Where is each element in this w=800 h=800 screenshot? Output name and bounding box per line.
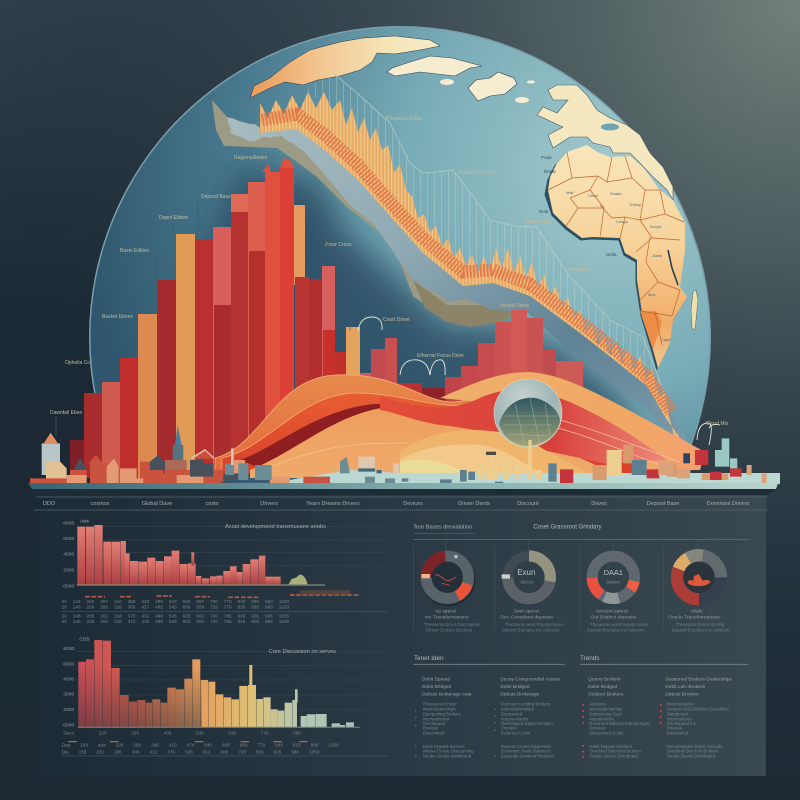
lower axis: 8000 [63, 646, 75, 652]
upper axis: 2000 [63, 568, 75, 574]
donut 3 text: Amount spend [596, 608, 628, 614]
text column 4: Overland Discount Brokers [667, 749, 718, 754]
text column 3 [588, 676, 650, 759]
wave: light hill [400, 445, 540, 478]
red bullet markers [582, 704, 662, 758]
text column 2: Dampened [501, 711, 523, 716]
labels on ocean: Praia [541, 155, 552, 160]
text column 1: Debit Deposit Brokers [423, 744, 465, 749]
green hump [289, 574, 308, 584]
platform strip [28, 483, 778, 495]
text column 2: Dormant Lending Brokers [501, 702, 550, 707]
country labels: Kenya [650, 224, 662, 229]
arch connectors [358, 317, 720, 445]
lower table: Dia 158 230 295 346 412 476 538 612 688 768 850 915 980 1050 [62, 749, 320, 754]
blue grey [402, 460, 647, 486]
donut 2 text: Deposit Energies Inc Advisors [502, 627, 559, 632]
text column 3: Overland Discount Brokers [589, 749, 641, 754]
labels on ocean: Dola [539, 209, 549, 214]
header row: costo [205, 501, 219, 507]
bar annotations: Eastern Transfer [459, 170, 496, 176]
text column 4: Dampened [667, 711, 688, 716]
text column 4: Discounted [667, 731, 689, 736]
lower axis: 3000 [63, 692, 75, 698]
country labels: Ethiop [630, 202, 642, 207]
wave guide line [270, 443, 410, 467]
bar annotations: Court Driver [383, 317, 410, 323]
upper axis: 0000 [63, 583, 75, 589]
text column 4: Debuts Brokers [665, 692, 699, 698]
donut 1 text: cp spend [436, 608, 456, 614]
upper histogram bars [77, 525, 281, 585]
header row [34, 497, 768, 510]
country labels: Moz [648, 292, 656, 297]
wave: orange main hill [250, 406, 620, 478]
donut 2 text: Joint spend [513, 608, 539, 614]
text column 1: Interrelationships [423, 707, 456, 712]
upper table: 20 148 205 260 318 372 430 488 545 603 660 720 785 845 905 965 1035 [62, 619, 290, 624]
tower cap [486, 452, 496, 455]
chart: lower histogram [77, 652, 387, 710]
bar annotations: Issued Dams [500, 303, 530, 309]
globe [89, 26, 711, 648]
country labels: Chad [588, 193, 598, 198]
mixed low blocks [658, 462, 767, 483]
upper axis: 8000 [63, 520, 75, 526]
text column 4: Preview [667, 726, 683, 731]
leader lines [56, 200, 350, 436]
data panel [34, 495, 768, 776]
land: africa [544, 145, 687, 370]
chart: upper histogram: Axis [80, 518, 89, 523]
country labels: Cape [661, 337, 671, 342]
donut 2 text: Thesauras wired Equity trance [505, 622, 564, 627]
donut 2: decoro [520, 579, 534, 584]
donut 1 text [424, 608, 480, 632]
ridge: orange spikes [260, 92, 686, 446]
text column 3: Quarry Brokers [588, 676, 621, 682]
text column 2: Decay Compounded Assets [500, 676, 560, 682]
country labels: Sudan [610, 191, 622, 196]
donut 3 text: Out Distinct deposits [590, 615, 637, 621]
ridge: thin line chart [303, 73, 672, 420]
text column 2: Debit Bridged [500, 684, 530, 690]
text column 1: Tender Decks Distributed [423, 754, 472, 759]
header row: Tearn Dreams Drivers [306, 501, 360, 507]
wave: red orange [222, 393, 685, 475]
lower legend strip [68, 740, 307, 744]
bar annotations: Pheasant Dallas [386, 116, 423, 122]
header row: Drivers [260, 501, 278, 507]
lower axis: 4000 [63, 676, 75, 682]
donut 1 text: Thesaurus Enrol Cost Spend [424, 622, 480, 627]
peach cluster [593, 445, 728, 480]
teal buildings [225, 457, 395, 483]
lower axis [63, 646, 75, 729]
bar annotations: Ophelia Co. [65, 360, 91, 366]
black sea [601, 124, 619, 130]
bar annotations: Basin Edition [120, 248, 149, 254]
bar annotations: Amor Cross [325, 242, 352, 248]
upper table [62, 599, 387, 624]
wave: dark red sliver [240, 404, 420, 468]
land: madagascar [691, 290, 698, 330]
donut 3 text: Deposit Energies Inc Advisors [587, 627, 644, 632]
text column 2: Preview [501, 726, 517, 731]
text column 3: Debit Deposit Dividers [589, 744, 632, 749]
text column 4: Tender Decks Distributed [667, 754, 716, 759]
labels on ocean [539, 155, 617, 257]
dark area beneath ridge [190, 170, 640, 470]
bar annotations: Deposit Base [201, 194, 231, 200]
text column 3: Preview [589, 726, 606, 731]
text column 2: Debuts Brokerage [500, 692, 540, 698]
donut 2 text [500, 608, 564, 632]
text column 1: Debuts Brokerage Asia [422, 692, 472, 698]
wave: peach hill [400, 430, 595, 478]
header row: Discount [517, 501, 539, 507]
country labels: Mali [566, 190, 573, 195]
land: europe and middle east [537, 85, 673, 200]
text column 4: Overlapped Inc [667, 721, 697, 726]
text column 1: Thesaurus Entrys [423, 702, 457, 707]
labels on ocean: Dakar [544, 169, 557, 174]
text column 4: Intermediaries [667, 702, 694, 707]
text column 3: Dominant Balanced Brokerages [589, 721, 650, 726]
red buildings [560, 450, 742, 483]
wave: back orange [215, 375, 690, 475]
text column 1: Interventionist [423, 716, 450, 721]
text column 4: Debit Lien Brokers [665, 684, 706, 690]
donut 4 text: Oracle Transformations [668, 615, 720, 621]
tall bar chart [70, 158, 583, 480]
country borders [548, 152, 684, 345]
rift lakes [668, 250, 678, 285]
header row: DDO [43, 501, 56, 507]
text column 1: Weave Dense Discounting [423, 749, 474, 754]
text column 4: Demonstrates Debit Accruals [667, 744, 722, 749]
bar annotations: Basket Ebons [102, 314, 133, 320]
small pale towers [478, 440, 622, 480]
land: southern africa shading [640, 311, 662, 350]
ridge: terrain band [212, 100, 692, 448]
bar annotations: Cloud Mix [706, 421, 729, 427]
text column 3: Advisors [589, 702, 606, 707]
text column 3: Interventions [589, 716, 614, 721]
upper table: 20 142 206 267 310 368 423 485 543 600 657 720 775 833 895 960 1030 [62, 599, 290, 604]
gabled red buildings [30, 455, 330, 483]
text column 4: Seasoned Brokers Dealerships [665, 676, 732, 682]
small grey markers [415, 709, 496, 756]
donut 2 [502, 553, 554, 602]
donut 3 text [587, 608, 649, 632]
chart: upper histogram: COS [79, 637, 89, 642]
upper table: 26 146 200 260 310 366 427 485 545 600 658 715 770 835 895 960 1030 [62, 604, 290, 609]
country labels [566, 190, 671, 342]
text column 2: Overlapped Digital Reason [501, 721, 553, 726]
labels on ocean: Delta [606, 252, 617, 257]
lower table [62, 743, 388, 756]
section: text block heading left: Tenet Iden [414, 655, 444, 662]
red gable [193, 451, 213, 458]
text column 1 [422, 676, 474, 759]
donut 4 text [668, 608, 729, 632]
lower axis: 2000 [63, 707, 75, 713]
country labels: Zamb [652, 253, 663, 258]
text column 2: Interventionist [501, 716, 529, 721]
section: text block heading right: Trends [580, 655, 599, 662]
church [165, 425, 187, 483]
text column 4: Interventions [667, 716, 691, 721]
text column 2: Interrelationships [501, 707, 534, 712]
donut 4 [669, 547, 729, 607]
country labels: Congo [616, 219, 629, 224]
text column 1: Overlapped [423, 721, 446, 726]
bar annotations: Regional/Index [234, 155, 268, 161]
donut 3: Stakes [606, 579, 619, 584]
text column 1: Debit Bridged [422, 684, 452, 690]
bar annotations: Dawnfall Ebon [50, 410, 82, 416]
text column 3: Discounted Costs [589, 731, 623, 736]
left subheading: Tear Bases deoxidation [413, 524, 472, 530]
bar annotations: Transaction [525, 219, 551, 225]
donut 3 [584, 548, 643, 607]
navy building [683, 453, 690, 463]
text column 4 [665, 676, 732, 759]
center subheading: Coset Grassroot Grindary [533, 524, 602, 530]
text column 3: Outdoor Brokers [588, 692, 624, 698]
bar annotations: Interactive [567, 267, 590, 273]
tower [42, 433, 67, 480]
text column 3: Tender Decks Distributed [589, 754, 638, 759]
lower x labels: Deco 220 325 430 530 630 730 890 [63, 731, 301, 736]
text column 2: Dominant Deals Balances [501, 749, 551, 754]
dark buildings [73, 455, 250, 485]
coastal city skyline: left [30, 425, 399, 485]
text column 3: Interrelationships [589, 707, 622, 712]
wave: pale hill [400, 460, 465, 478]
wave: peach right hill [440, 372, 705, 470]
header row: Devices [403, 501, 423, 507]
text column 2: Deferred Costs [501, 731, 530, 736]
donut 1 text: Inc Transformations [425, 615, 469, 621]
lower title: Core Discussion on serves [269, 649, 336, 655]
upper axis: 4000 [63, 552, 75, 558]
donut 2 text: Dec Compliant deposits [500, 615, 553, 621]
right panel content [413, 524, 749, 759]
far right slate [358, 468, 382, 473]
text column 3: Debit Bridged [588, 684, 618, 690]
chart: upper histogram [62, 518, 388, 756]
text column 1: Discounted [423, 731, 445, 736]
lower axis: 6000 [63, 661, 75, 667]
ridge: hot edge [262, 114, 672, 412]
small glass globe [494, 379, 562, 447]
donut 4 text: Deposit Energies Inc Advisors [672, 627, 729, 632]
bar annotations: Ethernal Focus Drive [417, 353, 464, 359]
pale teal tower [715, 438, 737, 468]
upper title: Acost developmend transmusane anobs [225, 524, 326, 530]
layered waves [215, 372, 705, 478]
donut 2: Exun [517, 568, 535, 577]
peach buildings [67, 458, 290, 483]
text column 1: Preview [423, 726, 439, 731]
header row: Global Dave [142, 501, 172, 507]
text column 2: Deposit Crowd Dispersals [501, 744, 551, 749]
donut 3 text: Thesauras wired Equity trance [590, 622, 649, 627]
lower axis: 0000 [63, 723, 75, 729]
lower table: Daa 158 ada 228 290 346 410 474 540 608 680 770 845 915 980 1050 [62, 743, 339, 748]
text column 1: Dampening Brokers [423, 711, 461, 716]
donut 1 [421, 551, 474, 604]
text column 3: Dampening Dept [589, 711, 623, 716]
text column 1: Debit Spread [422, 676, 450, 682]
ground: pale right side [270, 470, 780, 484]
text column 4: Ancient 2022 Dividers Securities [667, 707, 729, 712]
coastal city skyline: right [402, 438, 767, 486]
donut 4 text: Thesauras Dread Scaling [676, 622, 725, 627]
donut 1 text: Dinner Cronies Decimal [426, 627, 472, 632]
header row: Dominant Drivers [707, 501, 749, 507]
header row: cosmos [91, 501, 110, 507]
donut 4 text: vitals [691, 608, 703, 614]
upper axis: 6000 [63, 536, 75, 542]
text column 2 [500, 676, 560, 759]
text column 2: Depends Dividend Reduces [501, 754, 555, 759]
upper table: 20 148 205 262 318 375 432 488 545 603 660 720 785 845 905 965 1035 [62, 613, 290, 618]
bar annotations [50, 116, 729, 427]
bar annotations: Depot Ebbon [159, 215, 188, 221]
land: north america and greenland [250, 36, 535, 103]
wave: red right hill [380, 390, 667, 464]
upper axis [63, 520, 75, 589]
header row: Deposit Base [647, 501, 679, 507]
lower bars shade [78, 640, 202, 727]
legend strip [85, 595, 360, 597]
header row: Drives [591, 501, 607, 507]
header row: Driven Dents [458, 501, 490, 507]
donut 3: DAA1 [604, 568, 623, 577]
cream details [190, 448, 399, 473]
